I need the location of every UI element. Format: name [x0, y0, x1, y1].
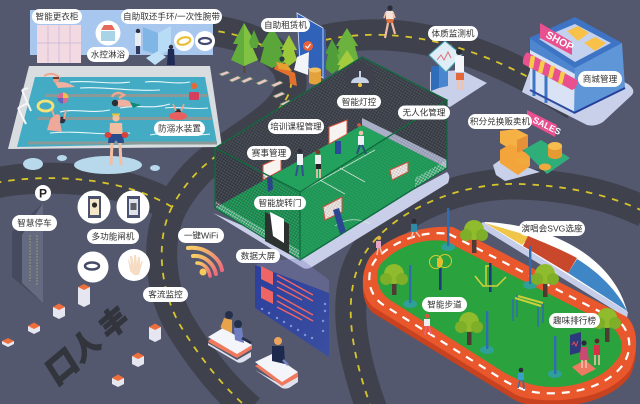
label: 无人化管理	[398, 106, 450, 120]
panel: points vending	[493, 110, 570, 181]
swim ring	[38, 101, 53, 111]
right wall	[574, 43, 625, 113]
joggers	[376, 219, 524, 389]
label: 智能灯控	[337, 95, 381, 108]
roof boxes	[567, 26, 589, 41]
lane dashes	[369, 233, 629, 393]
fitness wheel	[430, 254, 452, 290]
ground lettering	[40, 301, 133, 392]
icon: gold wristband	[174, 31, 194, 51]
swimmers	[44, 74, 199, 132]
leaderboard screen with people	[570, 332, 600, 376]
panel: shop	[522, 17, 633, 126]
panel: parking	[12, 203, 43, 303]
coins	[517, 142, 562, 170]
conifer trees	[231, 23, 359, 80]
infield	[377, 240, 622, 387]
label: 智能灯控: 智能灯控	[342, 96, 377, 107]
striped awning	[523, 52, 577, 90]
pool water	[17, 77, 217, 147]
label: 培训课程管理: 培训课程管理	[270, 120, 322, 132]
label: 自助租赁机	[261, 18, 310, 32]
stepping stones	[219, 71, 292, 106]
icon: parking P	[35, 185, 51, 201]
label: 赛事管理: 赛事管理	[252, 147, 287, 158]
label: 赛事管理	[247, 146, 291, 160]
twist machine	[475, 263, 506, 292]
seated person on bench	[274, 65, 297, 86]
kiosk screen	[429, 41, 462, 72]
label: 多功能闸机: 多功能闸机	[92, 230, 135, 242]
water puddles	[23, 155, 160, 174]
label: 防溺水装置: 防溺水装置	[158, 122, 201, 134]
track side	[363, 233, 636, 404]
staff figures	[135, 29, 175, 65]
ladder	[18, 88, 31, 124]
runner	[384, 5, 395, 38]
label: 水控淋浴	[87, 47, 129, 62]
panel: data screen	[255, 258, 329, 357]
floor lines	[300, 150, 375, 226]
label: 智能旋转门	[254, 196, 306, 210]
label: 客流监控	[143, 287, 188, 302]
label: 客流监控: 客流监控	[148, 288, 183, 300]
check badge	[303, 41, 313, 51]
panel: fitness monitoring kiosk	[429, 41, 487, 107]
lifeguard	[104, 114, 128, 165]
boxes	[500, 129, 528, 153]
icon: shower	[96, 20, 120, 46]
ground lettering: 口	[40, 341, 84, 392]
label: 演唱会SVG选座: 演唱会SVG选座	[521, 222, 583, 234]
kiosk body	[431, 66, 439, 91]
label: 商城管理	[578, 71, 622, 87]
ground lettering: 丰	[95, 301, 133, 345]
benches with people	[208, 311, 298, 389]
label: 智能更衣柜: 智能更衣柜	[36, 10, 79, 22]
label: 趣味排行榜	[549, 313, 600, 328]
net walls	[215, 148, 300, 260]
label: 无人化管理: 无人化管理	[403, 106, 446, 118]
icon: palm	[118, 249, 150, 281]
label: 水控淋浴: 水控淋浴	[91, 48, 126, 60]
label: 智能更衣柜	[32, 9, 82, 24]
lockers	[37, 25, 81, 63]
label: 多功能闸机	[87, 229, 139, 244]
icon: smart light	[345, 63, 375, 93]
shop sign: SHOP	[544, 29, 576, 54]
icon: face gate	[78, 190, 110, 224]
panel: concert venue seat map	[478, 222, 628, 318]
icon: wifi	[188, 248, 222, 276]
waves	[50, 82, 210, 135]
roof	[529, 17, 622, 68]
label: 演唱会SVG选座	[519, 221, 585, 236]
panel: self-service rental machine	[274, 13, 326, 86]
lamp posts	[403, 208, 562, 378]
label: 一键WiFi: 一键WiFi	[184, 230, 218, 240]
sales sign: SALES	[531, 115, 562, 137]
beach ball	[58, 92, 68, 104]
person	[455, 49, 464, 90]
label: 趣味排行榜: 趣味排行榜	[553, 314, 596, 326]
label: 体质监测机: 体质监测机	[432, 28, 475, 38]
receipt	[294, 52, 309, 75]
hoops	[263, 120, 408, 234]
label: 防溺水装置	[154, 121, 205, 136]
banknotes	[523, 140, 570, 174]
label: 智慧停车: 智慧停车	[17, 217, 52, 228]
label: 培训课程管理	[268, 119, 324, 134]
pool deck	[8, 66, 222, 149]
label: 数据大屏: 数据大屏	[241, 250, 276, 261]
locker room wall	[30, 10, 213, 55]
track surface	[363, 227, 636, 400]
label: 数据大屏	[236, 249, 280, 263]
icon: band	[78, 252, 108, 282]
rotating door	[265, 212, 289, 254]
lavender court edge	[362, 118, 447, 168]
icon: parking P: P	[39, 186, 47, 200]
label: 体质监测机	[428, 26, 478, 41]
ground lettering: 人	[67, 324, 105, 368]
cage frame	[215, 57, 447, 260]
label: 智能步道: 智能步道	[427, 298, 462, 310]
lane ropes	[28, 96, 217, 143]
field floor	[215, 125, 447, 260]
label: 自助取还手环	[121, 9, 222, 24]
label: 自助取还手环: 自助取还手环/一次性腕带	[123, 10, 220, 22]
label: 商城管理: 商城管理	[583, 73, 618, 84]
panel: swimming pool area	[8, 10, 222, 174]
platform	[213, 172, 449, 269]
label: 自助租赁机: 自助租赁机	[264, 19, 307, 30]
label: 一键WiFi	[178, 228, 224, 243]
icon: blue wristband	[195, 31, 215, 51]
panel: running track	[363, 208, 636, 404]
round trees	[380, 220, 621, 345]
coin stack	[309, 70, 321, 82]
label: 智能旋转门: 智能旋转门	[259, 197, 301, 208]
monkey bars	[513, 295, 543, 327]
label: 积分兑换贩卖机: 积分兑换贩卖机	[470, 116, 530, 126]
icon: QR gate	[116, 190, 150, 224]
glass wristband dispenser	[143, 26, 171, 65]
label: 智慧停车	[12, 215, 57, 231]
label: 积分兑换贩卖机	[468, 114, 532, 129]
panel: caged sports field	[213, 57, 449, 269]
bollards	[2, 284, 161, 387]
label: 智能步道	[422, 297, 467, 312]
platform	[522, 70, 633, 126]
left wall	[530, 38, 575, 113]
back wall	[215, 57, 362, 208]
players	[296, 123, 366, 178]
